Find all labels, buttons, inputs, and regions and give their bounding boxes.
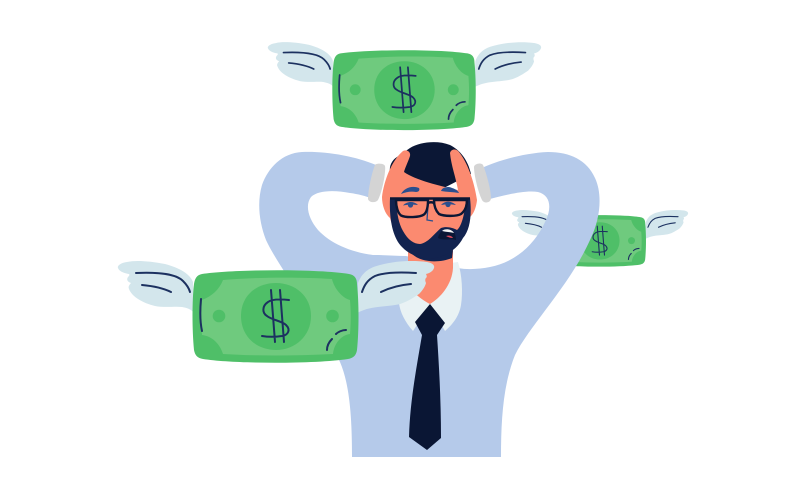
glasses (390, 198, 470, 217)
neck shadow (412, 250, 453, 261)
bill: large left (118, 261, 434, 363)
collar (399, 262, 462, 331)
man (259, 142, 600, 457)
shirt and arms (259, 152, 600, 457)
bill: top (268, 42, 541, 130)
tie (409, 304, 445, 450)
hair back (390, 142, 471, 190)
beard (390, 198, 471, 259)
eyebrows (401, 187, 459, 194)
head (382, 142, 477, 259)
mouth (438, 229, 456, 240)
eyes (403, 202, 456, 206)
bill: right, behind arm (512, 210, 688, 267)
cuffs (368, 164, 491, 202)
face and hands (382, 149, 477, 250)
nose (427, 206, 433, 221)
neck (408, 250, 453, 304)
